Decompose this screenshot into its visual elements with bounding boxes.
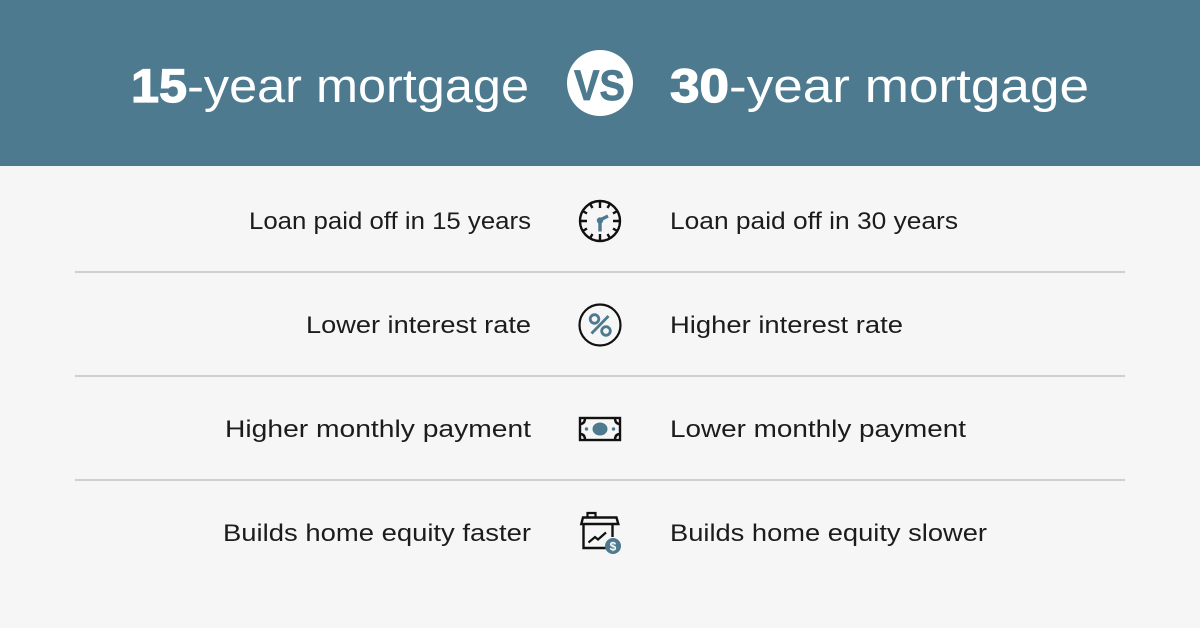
icon: banknote [580, 418, 620, 440]
row 3 right text: Lower monthly payment [670, 416, 966, 443]
icon: clock [580, 201, 620, 241]
row 2 left text: Lower interest rate [306, 312, 531, 339]
row 1 right text: Loan paid off in 30 years [670, 208, 958, 235]
row 4 left text: Builds home equity faster [223, 520, 531, 547]
header band [0, 0, 1200, 166]
row 2 right text: Higher interest rate [670, 312, 903, 339]
heading: 15-year mortgage: 15-year mortgage [131, 59, 529, 112]
heading: 30-year mortgage: 30-year mortgage [670, 59, 1089, 112]
VS badge [567, 50, 633, 116]
icon: house with growth chart and dollar badge [581, 513, 621, 554]
row 3 left text: Higher monthly payment [225, 416, 531, 443]
row 1 left text: Loan paid off in 15 years [249, 208, 531, 235]
icon: percent [580, 304, 620, 346]
row 4 right text: Builds home equity slower [670, 520, 987, 547]
icon: house with growth chart and dollar badge: $ [610, 540, 617, 554]
VS badge: VS [574, 62, 625, 110]
